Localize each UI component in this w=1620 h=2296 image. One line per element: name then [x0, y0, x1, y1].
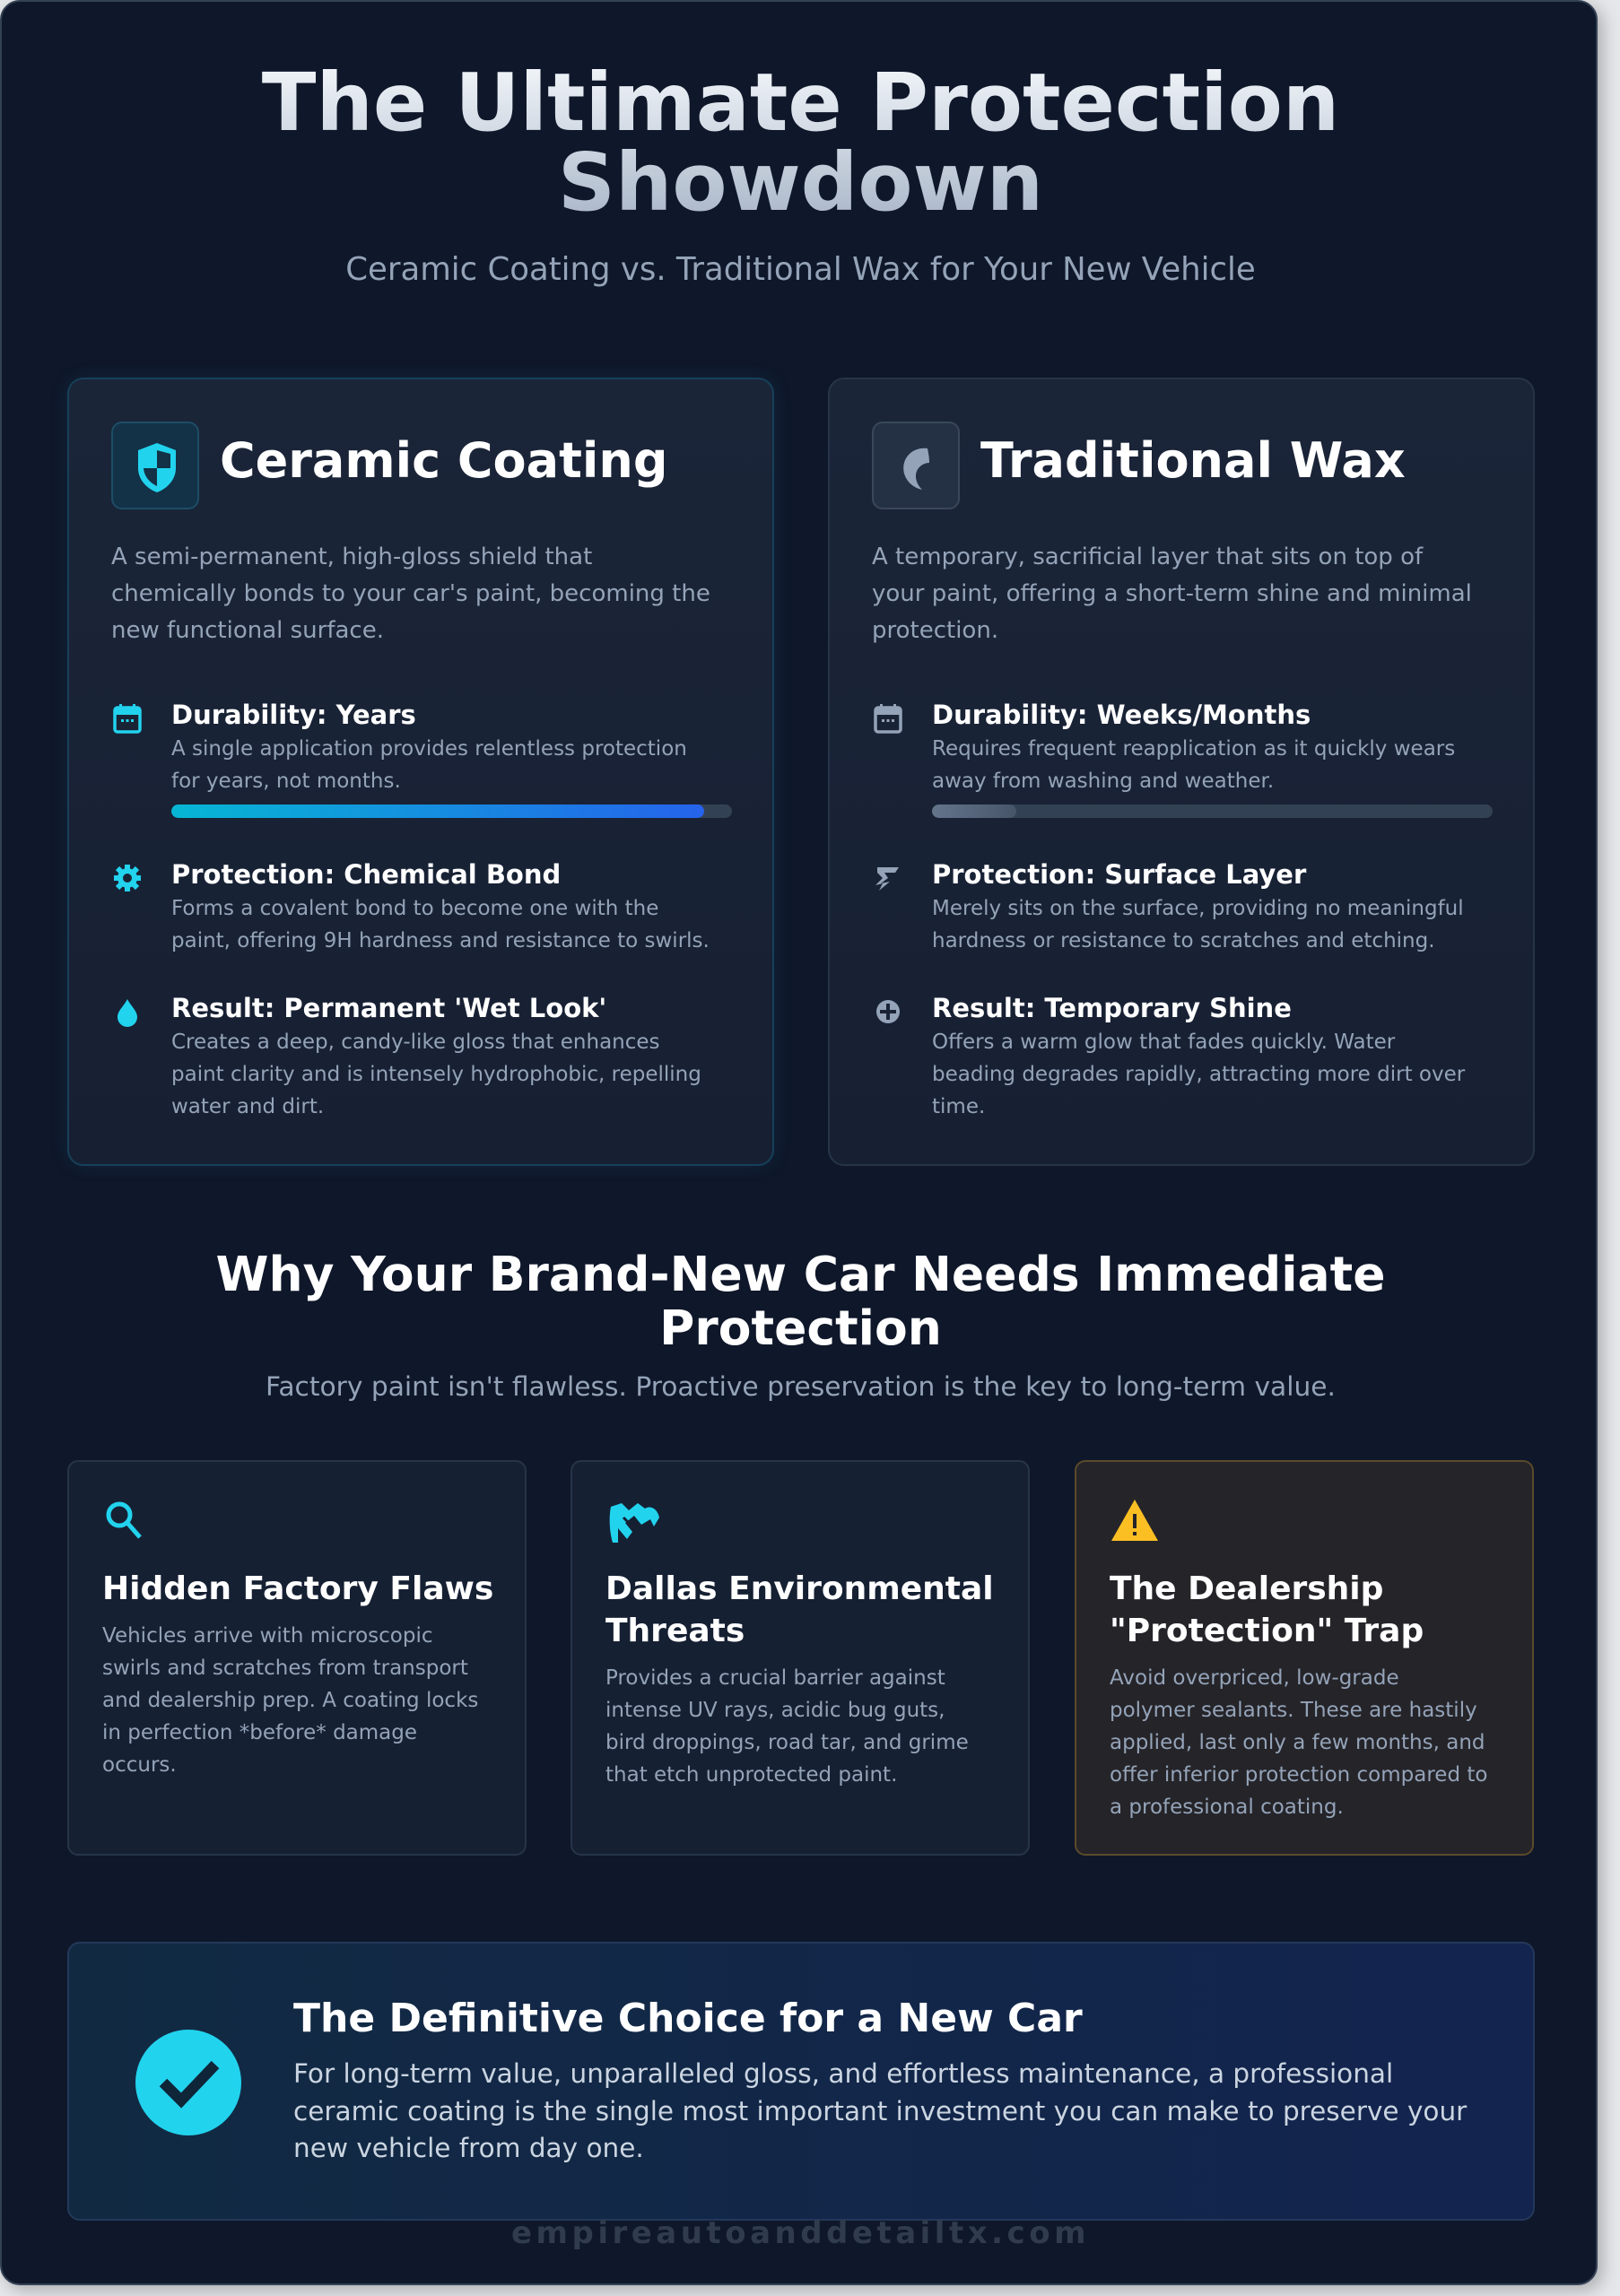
feature: wet look [118, 993, 701, 1118]
icon: environment [610, 1503, 659, 1543]
panel: dealership trap: Avoid overpriced, low-grade [1110, 1666, 1399, 1690]
icon: moon [872, 422, 960, 509]
icon: check circle [135, 2030, 241, 2135]
panel: hidden factory flaws [67, 1460, 527, 1856]
feature: durability weeks: Requires frequent reapplication as it quickly wears away from washing and weather. [932, 737, 1455, 793]
feature: surface layer [875, 859, 1464, 952]
feature: surface layer: Merely sits on the surface, providing no meaningful hardness or resistance to scratches and etching. [932, 897, 1464, 952]
section heading [215, 1246, 1385, 1356]
section heading: Protection [659, 1300, 942, 1356]
panel: dallas threats: Provides a crucial barrier against intense UV rays, acidic bug guts, bird droppings, road tar, and grime that etch unprotected paint. [605, 1666, 969, 1787]
feature: wet look: Result: Permanent 'Wet Look' [171, 993, 606, 1023]
feature: chemical bond [114, 859, 710, 952]
icon: calendar [874, 704, 902, 734]
callout: definitive choice [67, 1942, 1535, 2221]
feature: durability years: Durability: Years [171, 700, 416, 730]
icon: plus circle [876, 1000, 900, 1023]
panel: dallas threats [570, 1460, 1030, 1856]
panel: dealership trap: applied, last only a few months, and [1110, 1731, 1485, 1754]
icon: calendar [113, 704, 142, 734]
subtitle: Ceramic Coating vs. Traditional Wax for Your New Vehicle [345, 251, 1256, 288]
panel: dealership trap: offer inferior protection compared to [1110, 1763, 1487, 1787]
feature: durability years [113, 700, 732, 818]
feature: temporary shine [876, 993, 1466, 1118]
feature: durability years: A single application provides relentless protection for years, not months. [171, 737, 687, 793]
title: The Ultimate Protection [262, 56, 1339, 149]
text: ceramic description: A semi-permanent, high-gloss shield that chemically bonds to your car's paint, becoming the new functional surface. [111, 544, 710, 644]
panel: dealership trap [1075, 1460, 1534, 1856]
feature: temporary shine: Offers a warm glow that fades quickly. Water beading degrades rapidly, attracting more dirt over time. [932, 1031, 1465, 1118]
panel: dealership trap: a professional coating. [1110, 1796, 1344, 1819]
icon: brush [875, 867, 899, 891]
icon: shield [111, 422, 199, 509]
panel: ceramic coating [67, 378, 774, 1166]
section subtitle: Factory paint isn't flawless. Proactive preservation is the key to long-term value. [266, 1371, 1336, 1403]
panel: hidden factory flaws: Vehicles arrive with microscopic swirls and scratches from transport and dealership prep. A coating locks in perfection *before* damage occurs. [102, 1624, 478, 1777]
panel: dealership trap: The Dealership "Protection" Trap [1110, 1570, 1424, 1649]
feature: wet look: Creates a deep, candy-like gloss that enhances paint clarity and is intensely hydrophobic, repelling water and dirt. [171, 1031, 701, 1118]
title: Showdown [558, 135, 1043, 229]
icon: warning [1111, 1500, 1158, 1541]
feature: chemical bond: Forms a covalent bond to become one with the paint, offering 9H hardness and resistance to swirls. [171, 897, 710, 952]
icon: water drop [118, 999, 137, 1027]
callout heading: The Definitive Choice for a New Car [293, 1996, 1083, 2041]
feature: durability weeks: Durability: Weeks/Months [932, 700, 1311, 730]
progress bar: 95% [171, 804, 732, 818]
feature: temporary shine: Result: Temporary Shine [932, 993, 1292, 1023]
panel: hidden factory flaws: Hidden Factory Flaws [102, 1570, 493, 1607]
title [2, 63, 1599, 222]
heading: wax: Traditional Wax [980, 432, 1406, 489]
progress bar: 15% [932, 804, 1493, 818]
footer: website: empireautoanddetailtx.com [511, 2215, 1090, 2251]
section heading: Why Your Brand-New Car Needs Immediate [215, 1246, 1385, 1302]
feature: surface layer: Protection: Surface Layer [932, 859, 1306, 890]
heading: ceramic: Ceramic Coating [220, 432, 667, 489]
icon: magnifier [106, 1501, 142, 1539]
callout text: For long-term value, unparalleled gloss, and effortless maintenance, a professional ceramic coating is the single most important investment you can make to preserve your new vehicle from day one. [293, 2058, 1467, 2163]
text: wax description: A temporary, sacrificial layer that sits on top of your paint, offering a short-term shine and minimal protection. [872, 544, 1472, 644]
icon: gear [114, 865, 141, 891]
feature: durability weeks [874, 700, 1493, 818]
feature: chemical bond: Protection: Chemical Bond [171, 859, 561, 890]
panel: dealership trap: polymer sealants. These are hastily [1110, 1699, 1477, 1722]
panel: dallas threats: Dallas Environmental Threats [605, 1570, 994, 1649]
panel: traditional wax [828, 378, 1535, 1166]
